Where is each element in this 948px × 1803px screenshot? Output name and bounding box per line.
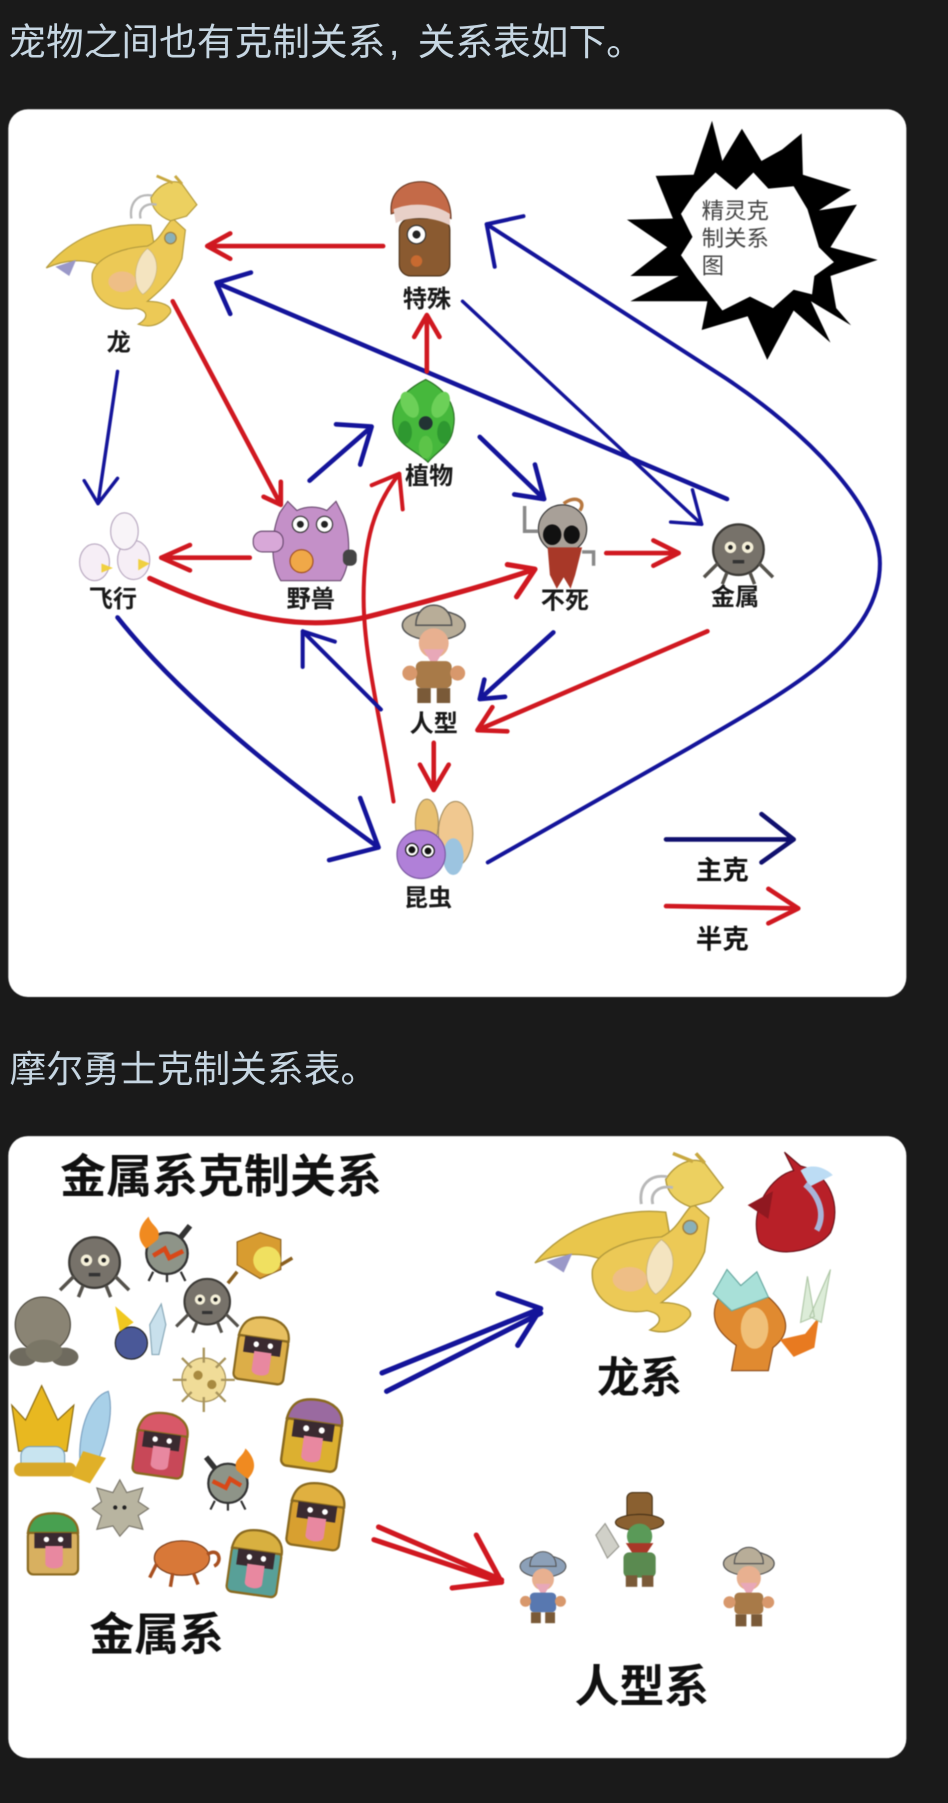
label: beast: 野兽: [287, 586, 335, 613]
icon: beast: [253, 501, 357, 581]
panel: spirit counter diagram: [8, 109, 906, 997]
arrow: flying to insect: [118, 617, 379, 860]
heading: Mole warrior counter table: 摩尔勇士克制关系表。: [9, 1049, 377, 1090]
label: metal: 金属: [711, 583, 759, 611]
label: plant: 植物: [405, 463, 453, 490]
group: metal type creatures: [9, 1217, 347, 1598]
arrow: special to dragon: [207, 233, 383, 259]
arrow: humanoid to insect: [420, 743, 449, 790]
label: dragon type: 龙系: [597, 1354, 682, 1402]
arrow: beast to flying: [161, 545, 250, 570]
burst badge: 精灵克制关系图: 图: [702, 254, 724, 279]
icon: flying chicks: [80, 513, 150, 581]
arrow: flying to undead: [150, 565, 535, 623]
label: metal type: 金属系: [89, 1609, 224, 1660]
icon: orange dragon: [713, 1269, 830, 1371]
label: undead: 不死: [541, 587, 589, 614]
label: humanoid: 人型: [410, 710, 458, 737]
arrow: metal to dragon type (double blue): [382, 1294, 541, 1391]
arrow: dragon to beast: [173, 301, 281, 505]
legend: half counter: 半克: [696, 925, 749, 955]
arrow: metal to humanoid type (double red): [374, 1527, 502, 1588]
icon: humanoid: [402, 605, 465, 703]
arrow: plant to special: [414, 315, 440, 371]
burst badge: 精灵克制关系图: 制关系: [702, 226, 769, 251]
icon: undead: [525, 499, 594, 589]
arrow: insect to plant: [364, 474, 403, 801]
heading: pet counter relations: ,: [389, 21, 399, 63]
icon: dragon: [46, 176, 197, 326]
arrow: undead to humanoid: [480, 632, 553, 699]
label: flying: 飞行: [89, 586, 137, 613]
icon: golden dragon: [535, 1153, 723, 1332]
heading: pet counter relations: 关系表如下。: [418, 21, 644, 63]
title: metal type counters: 金属系克制关系: [60, 1150, 382, 1202]
arrow: humanoid to beast: [303, 631, 381, 709]
icon: metal rock: [704, 524, 773, 584]
icon: brown hat humanoid: [596, 1493, 664, 1587]
arrow: special to metal: [463, 301, 702, 524]
arrow: beast to plant: [310, 424, 372, 481]
heading: pet counter relations: 宠物之间也有克制关系: [8, 21, 385, 63]
icon: red dragon: [748, 1152, 835, 1252]
burst badge: 精灵克制关系图: [627, 121, 878, 360]
legend: main counter: 主克: [696, 856, 749, 886]
label: special: 特殊: [403, 286, 451, 313]
legend: main counter: [666, 814, 794, 886]
icon: blue helmet humanoid: [520, 1552, 566, 1623]
icon: insect: [397, 799, 473, 879]
label: dragon: 龙: [107, 330, 131, 357]
label: insect: 昆虫: [404, 885, 452, 912]
icon: tan hat humanoid: [723, 1547, 774, 1626]
legend: half counter: [666, 889, 798, 955]
arrow: undead to metal: [606, 540, 679, 566]
burst badge: 精灵克制关系图: 精灵克: [702, 198, 769, 223]
arrow: insect to special (large curve): [487, 216, 880, 862]
label: humanoid type: 人型系: [575, 1661, 709, 1712]
panel: metal type counter relations: [8, 1136, 906, 1758]
arrow: metal to humanoid: [477, 631, 707, 731]
arrow: metal to dragon: [216, 273, 727, 499]
icon: special creature: [391, 182, 451, 276]
icon: plant creature: [393, 379, 454, 462]
arrow: dragon to flying: [84, 371, 118, 504]
arrow: plant to undead: [480, 437, 544, 499]
